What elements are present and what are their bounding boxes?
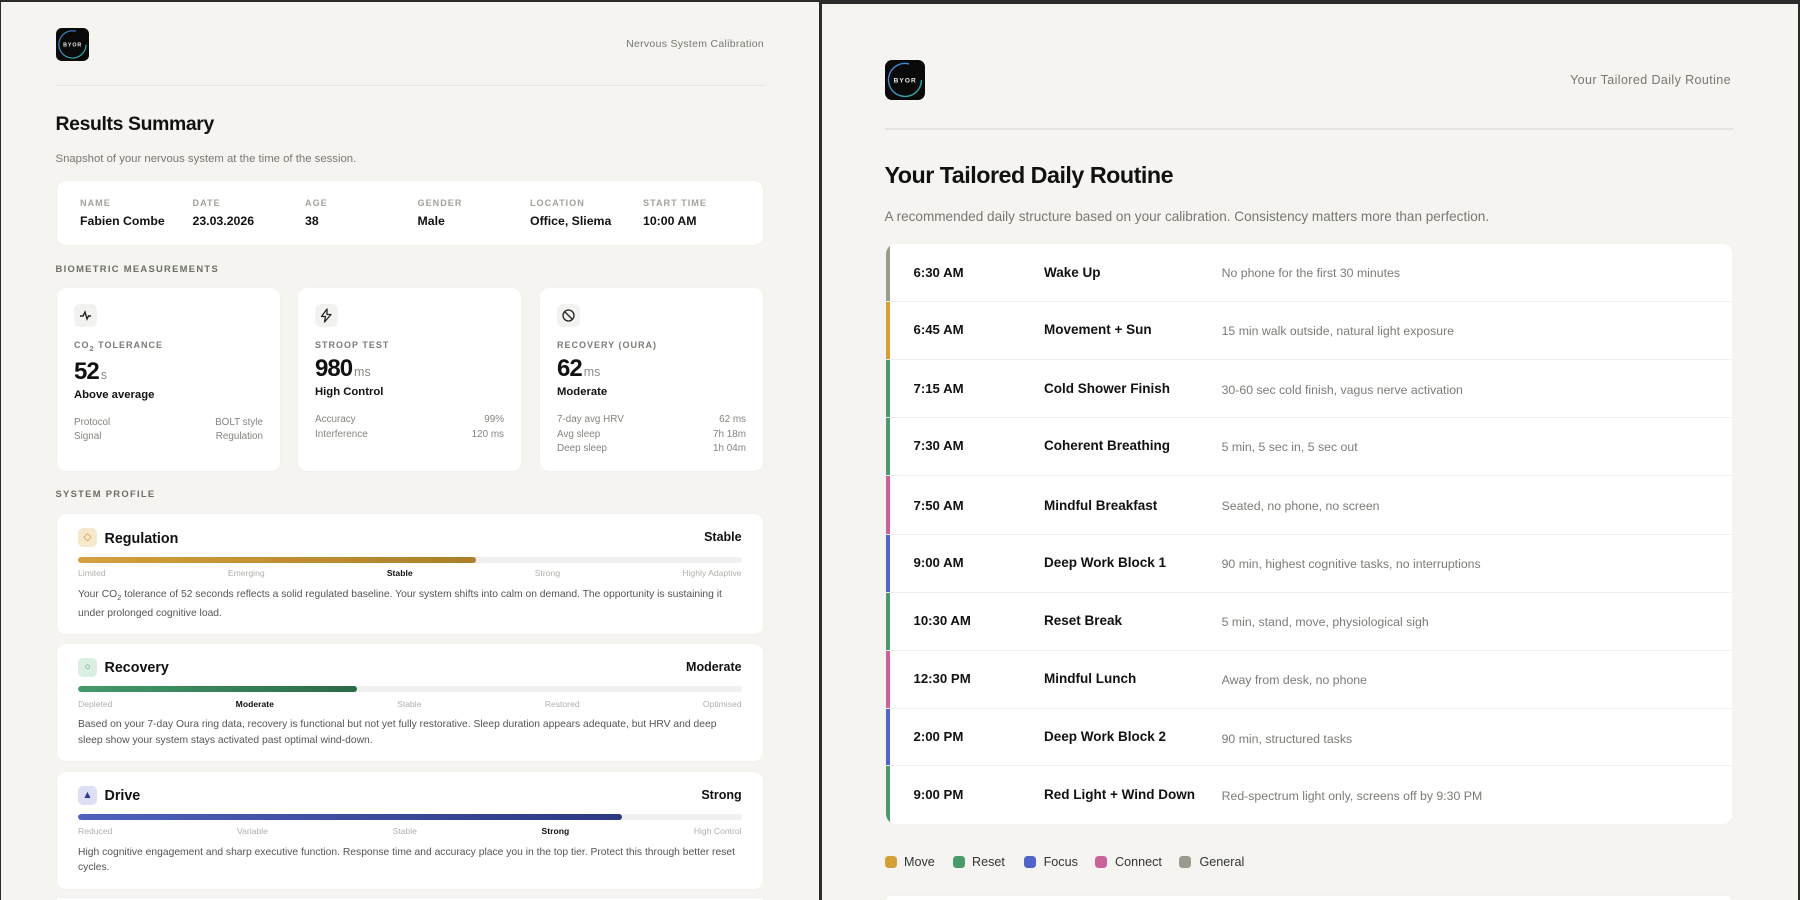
scale: drive: High Control (694, 826, 742, 836)
icon: ring (557, 304, 580, 327)
scale: recovery: Restored (545, 699, 580, 709)
card: stroop test: STROOP TEST (315, 340, 389, 350)
legend: Focus (1044, 855, 1078, 869)
row: 9:00 PM (886, 766, 1732, 824)
scale: regulation: Highly Adaptive (682, 568, 742, 578)
card: stroop test: Accuracy (315, 414, 356, 424)
row: 10:30 AM: 10:30 AM (914, 613, 971, 628)
card: recovery oura: 7h 18m (713, 428, 746, 440)
logo (56, 28, 89, 61)
header label: Nervous System Calibration (626, 38, 764, 50)
row: 7:15 AM: Cold Shower Finish (1044, 380, 1170, 396)
scale: regulation: Limited (78, 568, 106, 578)
section label: biometric: BIOMETRIC MEASUREMENTS (56, 262, 219, 274)
row: 12:30 PM: Mindful Lunch (1044, 670, 1136, 686)
card: stroop test: 120 ms (472, 428, 504, 440)
panel: schedule table (886, 244, 1732, 824)
legend: Move (904, 855, 935, 869)
card: CO2 tolerance (57, 288, 280, 471)
row: 12:30 PM (886, 651, 1732, 709)
row: 10:30 AM: Reset Break (1044, 613, 1122, 628)
card: recovery oura (540, 288, 763, 471)
row: 6:30 AM: Wake Up (1044, 264, 1101, 280)
scale: recovery: Moderate (236, 699, 274, 709)
card: stroop test: 99% (484, 414, 504, 424)
scale: recovery: Stable (397, 699, 421, 709)
card: recovery oura: 62 ms (719, 414, 746, 424)
row: 6:45 AM (886, 302, 1732, 360)
icon: circle: ○ (84, 661, 91, 673)
row: 2:00 PM: 90 min, structured tasks (1222, 732, 1352, 746)
row: 2:00 PM (886, 709, 1732, 766)
row: 7:50 AM: Mindful Breakfast (1044, 498, 1157, 512)
card: recovery (57, 644, 763, 761)
card: stroop test: Interference (315, 428, 368, 440)
field: start time: 10:00 AM (643, 214, 697, 228)
legend (885, 855, 1244, 869)
icon: pulse (74, 304, 97, 327)
progress bar: recovery (78, 686, 742, 692)
progress bar: drive (78, 814, 742, 820)
card: CO2 tolerance: CO2 TOLERANCE (74, 340, 163, 353)
card: stroop test (298, 288, 521, 471)
row: 7:30 AM (886, 418, 1732, 476)
icon: triangle (78, 786, 97, 805)
field: age: 38 (305, 214, 319, 228)
section label: system profile: SYSTEM PROFILE (56, 488, 155, 498)
row: 6:45 AM: Movement + Sun (1044, 322, 1152, 337)
scale: regulation: Stable (387, 568, 413, 578)
logo (885, 60, 925, 100)
progress bar: regulation (78, 556, 742, 562)
card: drive (57, 772, 763, 889)
logo: BYOR (63, 42, 82, 48)
row: 6:30 AM (886, 244, 1732, 302)
card: CO2 tolerance: BOLT style (215, 416, 263, 428)
row: 9:00 PM: 9:00 PM (914, 786, 963, 802)
scale: drive: Variable (237, 826, 268, 836)
card: recovery: Moderate (686, 660, 742, 674)
card: next, cropped (57, 898, 763, 900)
field: name (80, 198, 165, 228)
card: recovery oura: 1h 04m (713, 443, 746, 454)
row: 7:50 AM: Seated, no phone, no screen (1222, 498, 1380, 512)
scale: recovery: Depleted (78, 699, 112, 709)
card: recovery oura: 7-day avg HRV (557, 414, 624, 424)
field: name: NAME (80, 198, 111, 208)
panel: session details (57, 181, 763, 245)
legend: Connect (1115, 855, 1162, 869)
row: 10:30 AM (886, 593, 1732, 651)
field: date (192, 198, 254, 228)
scale: regulation: Strong (535, 568, 560, 578)
row: 7:30 AM: 7:30 AM (914, 438, 964, 453)
icon: triangle: ▲ (82, 789, 93, 801)
card: drive: cycles. (78, 862, 110, 873)
card: regulation: Regulation (104, 530, 178, 546)
card: regulation (57, 514, 763, 634)
heading: Your Tailored Daily Routine (884, 162, 1173, 188)
card: recovery: Based on your 7-day Oura ring data, recovery is functional but not yet fully restorative. Sleep duration appears adequate, but HRV and deep (78, 719, 716, 730)
field: gender: Male (418, 214, 445, 228)
row: 12:30 PM: Away from desk, no phone (1222, 673, 1367, 687)
scale: regulation (78, 568, 742, 578)
field: gender (418, 198, 462, 228)
scale: recovery: Optimised (703, 699, 742, 709)
card: CO2 tolerance: Above average (74, 389, 154, 401)
row: 6:30 AM: 6:30 AM (914, 264, 964, 280)
row: 10:30 AM: 5 min, stand, move, physiological sigh (1222, 614, 1429, 628)
field: date: DATE (192, 198, 221, 208)
row: 7:30 AM: Coherent Breathing (1044, 438, 1170, 453)
field: age (305, 198, 328, 228)
panel: daily routine: General (1200, 855, 1244, 869)
card: drive: Strong (701, 788, 742, 802)
field: location (530, 198, 612, 228)
row: 9:00 PM: Red Light + Wind Down (1044, 786, 1195, 802)
card: recovery: Recovery (104, 660, 169, 676)
card: stroop test: High Control (315, 386, 383, 398)
card: regulation: Your CO2 tolerance of 52 seconds reflects a solid regulated baseline. Your system shifts into calm on demand. The opportunity is sustaining it (78, 589, 722, 602)
card: next, cropped (886, 896, 1732, 900)
row: 2:00 PM: Deep Work Block 2 (1044, 729, 1166, 744)
icon: bolt (315, 304, 338, 327)
card: CO2 tolerance: Regulation (216, 431, 263, 442)
card: recovery oura: 62ms (557, 355, 600, 382)
scale: drive: Stable (393, 826, 417, 836)
icon: diamond (78, 528, 97, 547)
scale: regulation: Emerging (228, 568, 265, 578)
row: 7:15 AM: 7:15 AM (914, 380, 964, 396)
row: 6:45 AM: 15 min walk outside, natural light exposure (1222, 324, 1454, 338)
subheading: Snapshot of your nervous system at the time of the session. (56, 153, 356, 165)
heading: Results Summary (56, 112, 214, 134)
card: drive: Drive (104, 788, 140, 804)
row: 9:00 AM: Deep Work Block 1 (1044, 555, 1166, 570)
field: date: 23.03.2026 (192, 214, 254, 228)
card: recovery oura: RECOVERY (OURA) (557, 340, 657, 350)
card: drive: High cognitive engagement and sharp executive function. Response time and accuracy place you in the top tier. Protect this through better reset (78, 847, 735, 858)
logo: BYOR (893, 77, 916, 84)
scale: recovery (78, 699, 742, 709)
scale: drive: Strong (542, 826, 569, 836)
header label: Your Tailored Daily Routine (1570, 73, 1731, 87)
row: 7:30 AM: 5 min, 5 sec in, 5 sec out (1222, 440, 1358, 454)
icon: diamond: ◇ (83, 531, 92, 543)
field: name: Fabien Combe (80, 214, 165, 228)
row: 9:00 AM: 9:00 AM (914, 555, 964, 570)
row: 7:15 AM: 30-60 sec cold finish, vagus nerve activation (1222, 382, 1463, 396)
card: recovery oura: Deep sleep (557, 443, 607, 454)
icon: circle (78, 658, 97, 677)
field: location: LOCATION (530, 198, 585, 208)
field: age: AGE (305, 198, 328, 208)
card: CO2 tolerance: Signal (74, 431, 101, 442)
row: 6:45 AM: 6:45 AM (914, 322, 964, 337)
card: CO2 tolerance: Protocol (74, 416, 110, 428)
scale: drive: Reduced (78, 826, 112, 836)
row: 9:00 PM: Red-spectrum light only, screens off by 9:30 PM (1222, 789, 1482, 803)
panel: results summary (1, 2, 819, 900)
scale: drive (78, 826, 742, 836)
legend: Reset (972, 855, 1005, 869)
card: regulation: under prolonged cognitive load. (78, 608, 222, 619)
row: 9:00 AM: 90 min, highest cognitive tasks, no interruptions (1222, 557, 1481, 571)
card: stroop test: 980ms (315, 355, 371, 382)
row: 12:30 PM: 12:30 PM (914, 670, 971, 686)
row: 7:15 AM (886, 360, 1732, 418)
field: start time (643, 198, 707, 228)
row: 6:30 AM: No phone for the first 30 minutes (1222, 266, 1400, 280)
card: recovery oura: Moderate (557, 386, 607, 398)
row: 2:00 PM: 2:00 PM (914, 729, 963, 744)
panel: daily routine (822, 4, 1798, 900)
card: recovery oura: Avg sleep (557, 428, 600, 440)
field: location: Office, Sliema (530, 214, 611, 228)
card: recovery: sleep show your system stays activated past optimal wind-down. (78, 735, 373, 746)
row: 7:50 AM: 7:50 AM (914, 498, 964, 512)
field: gender: GENDER (418, 198, 462, 208)
card: regulation: Stable (704, 530, 742, 544)
subheading: A recommended daily structure based on your calibration. Consistency matters more than perfection. (884, 209, 1489, 224)
row: 7:50 AM (886, 476, 1732, 535)
row: 9:00 AM (886, 535, 1732, 593)
field: start time: START TIME (643, 198, 707, 208)
card: CO2 tolerance: 52s (74, 358, 107, 385)
